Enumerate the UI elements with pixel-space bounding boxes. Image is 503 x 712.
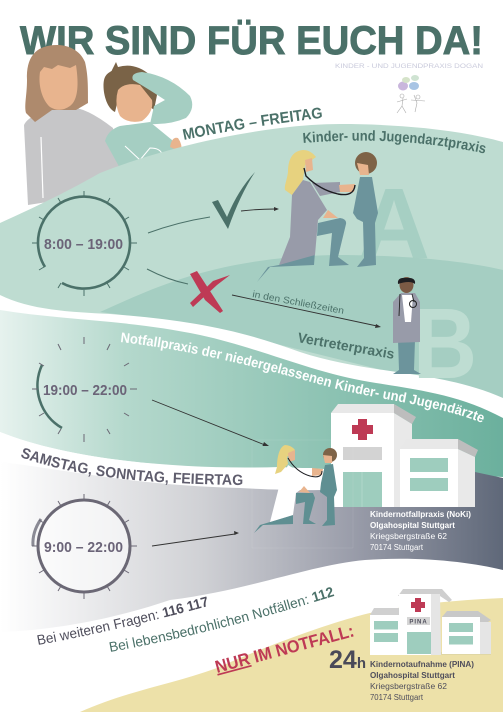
illustration: emergency doctor with child	[252, 440, 353, 548]
arrow: check mark to paediatric practice	[241, 207, 279, 211]
clock: 8:00 – 19:00: 8:00 – 19:00	[44, 236, 123, 253]
illustration: hospital PINA: PINA	[409, 620, 428, 626]
icon: balloon logo	[397, 75, 425, 113]
background wave: evening gradient	[0, 310, 503, 480]
icon: red cross mark	[190, 271, 230, 313]
clock: 9:00 – 22:00: 9:00 – 22:00	[44, 539, 123, 556]
text: questions phone number: Bei weiteren Fragen: 116 117	[37, 596, 207, 645]
clock: 8:00 – 19:00	[32, 191, 137, 296]
subtitle: practice name: KINDER - UND JUGENDPRAXIS DOGAN	[335, 63, 483, 70]
arrow: clock to cross	[147, 269, 188, 284]
letter B: B	[413, 288, 477, 400]
background wave: white stripe	[0, 432, 503, 500]
heading: Montag – Freitag: MONTAG – FREITAG	[182, 108, 322, 140]
heading: Kinder- und Jugendarztpraxis: Kinder- und Jugendarztpraxis	[303, 130, 486, 154]
icon: check mark	[212, 172, 255, 229]
label: in den Schließzeiten: in den Schließzeiten	[251, 289, 345, 317]
text: Kindernotaufnahme address	[370, 660, 474, 702]
arrow: closed-hours route	[232, 295, 381, 328]
background wave: light mint	[0, 124, 503, 410]
text: Kindernotfallpraxis address: Kriegsbergstraße 62	[370, 532, 448, 541]
illustration: child with raised arm	[103, 62, 192, 172]
clock: 19:00 – 22:00: 19:00 – 22:00	[43, 382, 127, 399]
illustration: substitute doctor	[393, 277, 421, 374]
arrow: evening clock to emergency practice	[152, 400, 269, 446]
text: Kindernotfallpraxis address: Kindernotfallpraxis (NoKi)	[370, 510, 471, 519]
label: 24h: 24h	[329, 646, 366, 674]
text: Kindernotfallpraxis address: Olgahospital Stuttgart	[370, 521, 455, 530]
clock: 9:00 – 22:00	[32, 494, 137, 599]
letter A: A	[358, 168, 430, 280]
background wave: weekend gradient	[0, 462, 503, 632]
background wave: sand yellow	[80, 598, 503, 712]
label: Vertreterpraxis: Vertreterpraxis	[296, 329, 396, 362]
text: Kindernotfallpraxis address	[370, 510, 471, 552]
clock: 19:00 – 22:00	[32, 337, 137, 442]
illustration: hospital Olgahospital	[331, 404, 478, 507]
illustration: doctor examining child	[257, 150, 378, 282]
heading: Notfallpraxis der niedergelassenen Kinder- und Jugendärzte: Notfallpraxis der niedergelassenen Kinder- und Jugendärzte	[121, 332, 484, 422]
text: Kindernotaufnahme address: Olgahospital Stuttgart	[370, 671, 455, 680]
text: Kindernotaufnahme address: Kriegsbergstraße 62	[370, 682, 448, 691]
text: life-threatening emergency number: Bei lebensbedrohlichen Notfällen: 112	[109, 587, 334, 652]
illustration: hospital PINA	[370, 589, 491, 655]
arrow: weekend clock to emergency practice	[152, 531, 239, 546]
text: Kindernotaufnahme address: 70174 Stuttgart	[370, 693, 424, 702]
white band	[0, 295, 503, 416]
illustration: mother	[24, 45, 125, 205]
text: Kindernotfallpraxis address: 70174 Stuttgart	[370, 543, 424, 552]
arrow: clock to check mark	[148, 217, 210, 233]
heading: Nur im Notfall: NUR IM NOTFALL:	[213, 621, 356, 677]
title: WIR SIND FÜR EUCH DA!	[20, 18, 483, 63]
heading: Samstag, Sonntag, Feiertag: SAMSTAG, SONNTAG, FEIERTAG	[21, 448, 242, 486]
text: Kindernotaufnahme address: Kindernotaufnahme (PINA)	[370, 660, 474, 669]
background hill: darker mint	[100, 255, 503, 400]
